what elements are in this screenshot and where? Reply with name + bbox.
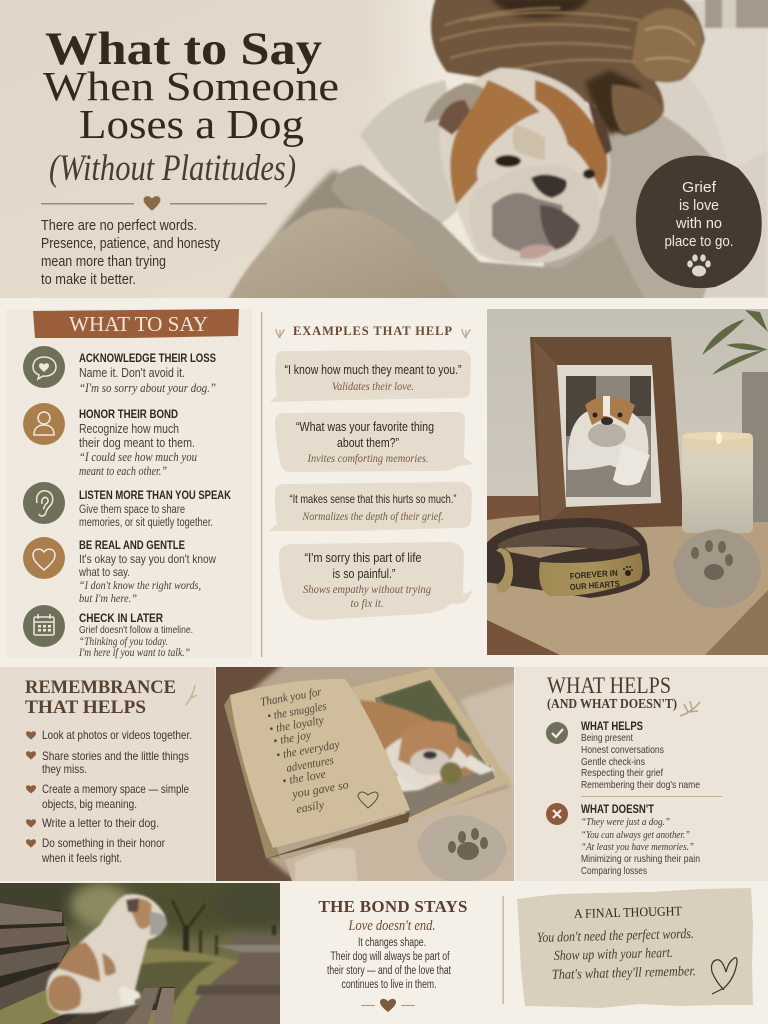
panel: the bond stays: their story — and of the love that xyxy=(327,965,452,977)
bubble 2: Invites comforting memories. xyxy=(307,451,428,465)
what doesn't list: Minimizing or rushing their pain xyxy=(581,853,700,865)
handwritten note: adventures xyxy=(285,753,335,775)
hero intro text: Presence, patience, and honesty xyxy=(41,236,221,252)
item: honor their bond: meant to each other.” xyxy=(79,463,167,478)
bubble 2: about them?” xyxy=(337,436,399,450)
heading: WHAT HELPS xyxy=(547,673,671,698)
bubble 1 xyxy=(270,350,471,402)
item: honor their bond: HONOR THEIR BOND xyxy=(79,407,178,421)
picture frame xyxy=(530,337,684,530)
remembrance list: Write a letter to their dog. xyxy=(42,816,159,830)
item: be real and gentle: “I don't know the right words, xyxy=(79,578,201,592)
candle xyxy=(682,432,753,533)
item: be real and gentle: It's okay to say you don't know xyxy=(79,552,216,566)
panel: the bond stays: Their dog will always be part of xyxy=(330,951,450,963)
bench xyxy=(0,903,175,1024)
panel: a final thought: A FINAL THOUGHT xyxy=(574,903,682,921)
quote badge: place to go. xyxy=(664,233,734,250)
item: acknowledge their loss: ACKNOWLEDGE THEIR LOSS xyxy=(79,351,216,365)
item: check in later: Grief doesn't follow a timeline. xyxy=(79,624,193,636)
what doesn't list: “You can always get another.” xyxy=(581,829,690,841)
heading banner: WHAT TO SAY xyxy=(69,312,208,336)
what helps list: WHAT HELPS xyxy=(581,721,643,733)
bubble 4: “I'm sorry this part of life xyxy=(304,551,422,565)
heading: EXAMPLES THAT HELP xyxy=(293,324,452,338)
icon: hand-drawn heart xyxy=(712,958,737,994)
title: When Someone xyxy=(43,63,339,109)
bubble 1: Validates their love. xyxy=(332,379,414,393)
remembrance list: Do something in their honor xyxy=(42,836,165,850)
bubble 3 xyxy=(269,482,472,531)
what doesn't list xyxy=(546,803,700,877)
bubble 2 xyxy=(275,412,474,472)
open book xyxy=(224,679,410,859)
panel: a final thought: You don't need the perfect words. xyxy=(537,927,694,946)
what doesn't list: WHAT DOESN'T xyxy=(581,804,654,816)
quote badge: Grief xyxy=(682,179,717,196)
handwritten note: • the love xyxy=(281,766,327,788)
hero intro text: to make it better. xyxy=(41,272,136,288)
panel: hero xyxy=(0,0,768,310)
heading xyxy=(547,673,700,716)
what helps list: Remembering their dog's name xyxy=(581,779,700,791)
heading: REMEMBRANCE xyxy=(25,677,176,698)
title xyxy=(43,23,339,189)
photo: memory book on blanket xyxy=(216,667,514,881)
remembrance list: Share stories and the little things xyxy=(42,749,189,763)
what helps list: Gentle check-ins xyxy=(581,756,645,768)
heading xyxy=(25,677,176,718)
what doesn't list: Comparing losses xyxy=(581,865,647,877)
handwritten note: • the snuggles xyxy=(266,699,328,723)
item: acknowledge their loss xyxy=(23,346,216,395)
item: check in later: CHECK IN LATER xyxy=(79,611,163,625)
handwritten note: Thank you for xyxy=(259,684,323,709)
plant xyxy=(702,310,768,375)
panel: a final thought: That's what they'll remember. xyxy=(552,964,696,983)
quote badge: is love xyxy=(679,197,719,214)
panel: the bond stays: continues to live in them. xyxy=(342,979,436,991)
bubble 4: to fix it. xyxy=(350,596,384,610)
bubble 2: “What was your favorite thing xyxy=(296,420,434,434)
panel: remembrance that helps xyxy=(0,667,215,881)
panel: a final thought xyxy=(517,888,753,1008)
item: be real and gentle: what to say. xyxy=(78,565,130,579)
item: honor their bond: their dog meant to them. xyxy=(79,436,195,450)
bubble 4: is so painful.” xyxy=(332,567,396,581)
handwritten note: you gave so xyxy=(290,777,350,801)
item: be real and gentle: but I'm here.” xyxy=(79,591,137,605)
quote badge xyxy=(636,156,762,288)
item: listen more than you speak: Give them space to share xyxy=(79,504,185,516)
title: What to Say xyxy=(45,23,323,75)
panel: the bond stays xyxy=(318,897,468,1012)
hero intro text: There are no perfect words. xyxy=(41,218,197,234)
panel: what helps and what doesn't xyxy=(515,667,768,881)
photo: memorial keepsakes xyxy=(485,309,768,656)
bubble 4 xyxy=(279,542,472,620)
what helps list xyxy=(546,721,700,791)
remembrance list: they miss. xyxy=(42,762,87,776)
collar xyxy=(485,518,650,598)
item: acknowledge their loss: “I'm so sorry about your dog.” xyxy=(79,380,216,395)
remembrance list: objects, big meaning. xyxy=(42,797,137,811)
heart divider xyxy=(41,196,267,211)
panel: the bond stays: Love doesn't end. xyxy=(348,918,436,934)
paw stone xyxy=(417,815,507,884)
hero intro text xyxy=(41,218,221,288)
bubble 3: Normalizes the depth of their grief. xyxy=(302,509,444,523)
icon: paw xyxy=(687,254,711,276)
item: be real and gentle: BE REAL AND GENTLE xyxy=(79,538,185,552)
what helps list: Respecting their grief xyxy=(581,767,663,779)
what helps list: Honest conversations xyxy=(581,744,664,756)
hero photo: woman hugging bulldog xyxy=(228,0,768,310)
vase xyxy=(742,372,768,522)
what helps list: Being present xyxy=(581,732,633,744)
hair xyxy=(431,0,705,136)
item: listen more than you speak xyxy=(23,482,231,529)
panel: a final thought: Show up with your heart. xyxy=(554,946,673,964)
item: honor their bond: Recognize how much xyxy=(79,422,179,436)
panel: the bond stays: It changes shape. xyxy=(358,937,426,949)
panel: examples that help xyxy=(269,324,474,620)
remembrance list: Create a memory space — simple xyxy=(42,782,189,796)
remembrance list xyxy=(26,728,192,865)
bulldog xyxy=(47,894,167,1014)
photo page with bulldog xyxy=(352,668,511,823)
item: check in later xyxy=(23,605,193,659)
bulldog head xyxy=(440,68,610,264)
photo: bulldog on park bench xyxy=(0,883,280,1024)
bubble 4: Shows empathy without trying xyxy=(303,582,431,596)
paw stone xyxy=(673,529,761,608)
collar: FOREVER IN xyxy=(569,568,618,581)
item: be real and gentle xyxy=(23,537,216,605)
item: check in later: I'm here if you want to talk.” xyxy=(78,647,190,659)
remembrance list: Look at photos or videos together. xyxy=(42,728,192,742)
bulldog on page xyxy=(360,700,495,792)
heart ornament xyxy=(361,999,415,1012)
heading: THAT HELPS xyxy=(25,697,146,718)
collar: OUR HEARTS xyxy=(569,579,620,592)
item: honor their bond xyxy=(23,403,197,478)
heading banner xyxy=(33,309,239,338)
remembrance list: when it feels right. xyxy=(41,851,122,865)
handwritten note: • the joy xyxy=(272,727,313,748)
handwritten note: • the everyday xyxy=(275,737,341,762)
item: acknowledge their loss: Name it. Don't avoid it. xyxy=(79,366,185,380)
what doesn't list: “At least you have memories.” xyxy=(581,841,694,853)
item: listen more than you speak: LISTEN MORE THAN YOU SPEAK xyxy=(79,488,231,502)
hero intro text: mean more than trying xyxy=(41,254,166,270)
panel: the bond stays: THE BOND STAYS xyxy=(318,897,468,916)
item: honor their bond: “I could see how much you xyxy=(79,449,197,464)
item: listen more than you speak: memories, or sit quietly together. xyxy=(79,517,213,529)
handwritten note: • the loyalty xyxy=(268,713,325,736)
panel: what to say xyxy=(6,309,252,659)
quote badge: with no xyxy=(675,215,722,232)
bubble 1: “I know how much they meant to you.” xyxy=(284,363,462,377)
trees xyxy=(0,883,280,956)
item: check in later: “Thinking of you today. xyxy=(79,636,168,648)
bubble 3: “It makes sense that this hurts so much.” xyxy=(290,492,456,506)
what doesn't list: “They were just a dog.” xyxy=(581,816,670,828)
heading: (AND WHAT DOESN'T) xyxy=(547,696,677,711)
title: Loses a Dog xyxy=(79,101,304,147)
title: (Without Platitudes) xyxy=(49,148,296,189)
handwritten note xyxy=(259,684,350,816)
handwritten note: easily xyxy=(295,797,326,816)
